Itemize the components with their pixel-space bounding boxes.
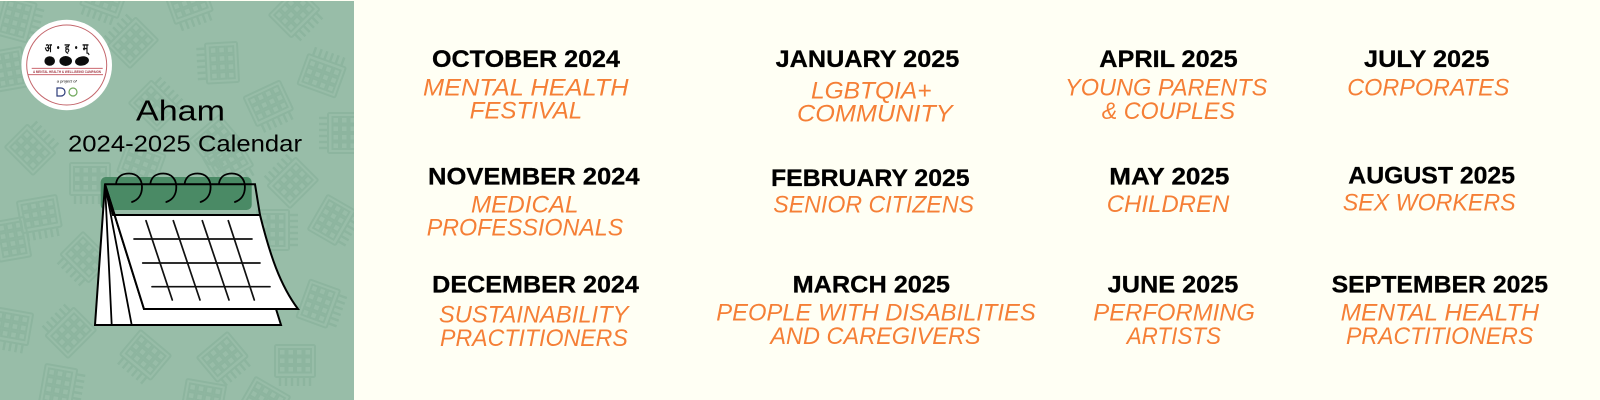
entry: September 2025: PRACTITIONERS	[1346, 323, 1533, 350]
entry: October 2024	[423, 46, 629, 124]
entry: November 2024	[427, 163, 640, 242]
partner logos	[57, 88, 77, 96]
entry: April 2025: APRIL 2025	[1099, 46, 1238, 73]
logo wordmark: अ · ह · म्	[45, 39, 90, 56]
entry: April 2025: YOUNG PARENTS	[1065, 75, 1267, 102]
entry: December 2024	[432, 272, 640, 352]
entry: January 2025: JANUARY 2025	[776, 46, 959, 73]
entry: March 2025	[716, 272, 1036, 350]
front page	[105, 184, 298, 309]
entry: July 2025: JULY 2025	[1364, 46, 1489, 73]
subheading: calendar years: 2024-2025 Calendar	[68, 131, 302, 157]
entry: September 2025: SEPTEMBER 2025	[1332, 272, 1548, 299]
logo blobs	[44, 55, 90, 67]
entry: September 2025: MENTAL HEALTH	[1341, 300, 1540, 327]
entry: January 2025	[776, 46, 959, 128]
entry: June 2025: ARTISTS	[1125, 323, 1221, 350]
entry: October 2024: FESTIVAL	[470, 97, 582, 124]
entry: October 2024: MENTAL HEALTH	[423, 74, 629, 102]
entry: July 2025	[1347, 46, 1509, 102]
entry: March 2025: PEOPLE WITH DISABILITIES	[716, 300, 1036, 327]
entry: October 2024: OCTOBER 2024	[432, 46, 621, 73]
entry: February 2025: FEBRUARY 2025	[771, 165, 970, 192]
heading: Aham: Aham	[136, 96, 225, 128]
entry: November 2024: NOVEMBER 2024	[428, 163, 640, 190]
icon: wall calendar	[95, 174, 298, 325]
entry: June 2025: JUNE 2025	[1108, 272, 1238, 299]
entry: June 2025: PERFORMING	[1093, 300, 1255, 327]
entry: June 2025	[1093, 272, 1255, 350]
entry: April 2025	[1065, 46, 1267, 125]
entry: November 2024: MEDICAL	[471, 191, 578, 218]
entry: July 2025: CORPORATES	[1347, 75, 1509, 102]
calendar binding band	[101, 177, 252, 210]
entry: September 2025	[1332, 272, 1548, 350]
entry: May 2025	[1107, 163, 1230, 218]
logo badge	[21, 20, 112, 110]
entry: May 2025: MAY 2025	[1109, 163, 1229, 190]
entry: December 2024: PRACTITIONERS	[440, 325, 628, 352]
panel: title and calendar	[0, 1, 354, 400]
entry: August 2025: AUGUST 2025	[1348, 163, 1515, 190]
entry: May 2025: CHILDREN	[1107, 191, 1230, 218]
entry: November 2024: PROFESSIONALS	[427, 215, 623, 242]
entry: December 2024: SUSTAINABILITY	[439, 302, 630, 329]
logo project note: a project of	[57, 78, 77, 84]
background pattern of small calendars	[0, 1, 354, 400]
entry: December 2024: DECEMBER 2024	[432, 272, 640, 299]
entry: August 2025	[1343, 163, 1516, 217]
spiral rings	[116, 174, 245, 202]
entry: January 2025: LGBTQIA+	[811, 77, 932, 104]
entry: April 2025: & COUPLES	[1102, 98, 1235, 125]
back pages	[95, 184, 281, 325]
top sheet header	[105, 184, 260, 215]
entry: January 2025: COMMUNITY	[797, 101, 955, 128]
entry: August 2025: SEX WORKERS	[1343, 190, 1516, 217]
calendar grid	[134, 221, 270, 300]
entry: March 2025: MARCH 2025	[793, 272, 950, 299]
entry: March 2025: AND CAREGIVERS	[768, 323, 981, 350]
entry: February 2025	[771, 165, 974, 219]
entry: February 2025: SENIOR CITIZENS	[773, 192, 974, 219]
logo tagline: A MENTAL HEALTH & WELL-BEING CAMPAIGN	[33, 70, 101, 74]
